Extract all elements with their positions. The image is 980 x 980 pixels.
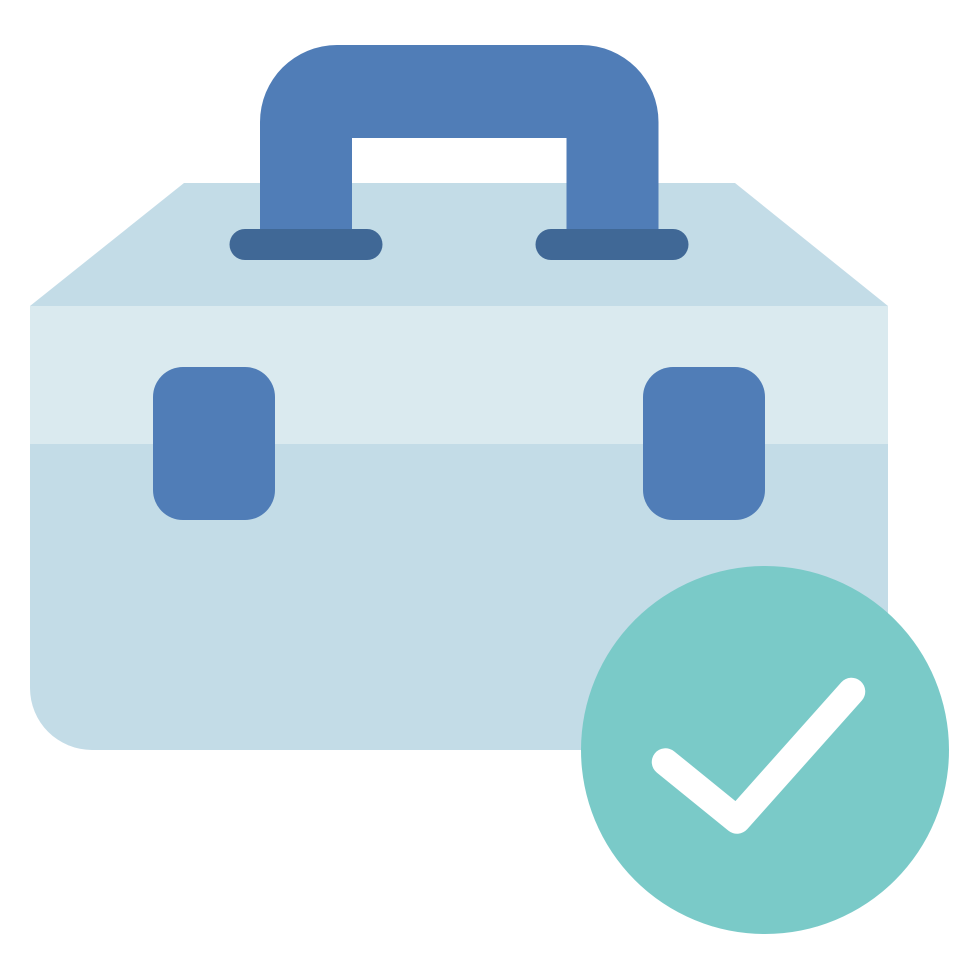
left latch <box>153 367 275 520</box>
check badge circle <box>581 566 949 934</box>
left handle base <box>230 229 382 260</box>
right latch <box>643 367 765 520</box>
right handle base <box>536 229 688 260</box>
check mark <box>666 692 852 820</box>
handle <box>260 45 658 245</box>
toolbox lid front band <box>30 306 888 444</box>
toolbox body <box>30 444 888 750</box>
toolbox lid top <box>30 183 888 306</box>
